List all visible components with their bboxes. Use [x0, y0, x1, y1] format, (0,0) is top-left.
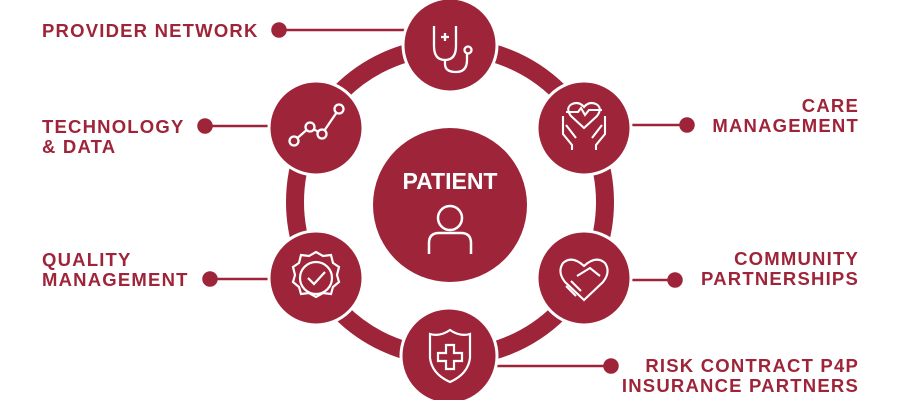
label: quality management: MANAGEMENT — [42, 269, 189, 290]
label: community partnerships: COMMUNITY — [734, 248, 859, 269]
node: technology & data (chart) — [269, 81, 363, 175]
label: risk contract: INSURANCE PARTNERS — [622, 375, 859, 396]
label: quality management: QUALITY — [42, 249, 132, 270]
connector lines — [198, 24, 694, 372]
center circle: patient: PATIENT — [403, 168, 497, 194]
node: risk contract (shield cross) — [401, 308, 497, 400]
label: care management: CARE — [802, 95, 859, 116]
label: community partnerships: PARTNERSHIPS — [701, 268, 859, 289]
center circle: patient — [373, 128, 527, 282]
node: community partnerships (handshake heart) — [537, 231, 631, 325]
label: technology & data: TECHNOLOGY — [42, 116, 185, 137]
label: technology & data: & DATA — [42, 136, 116, 157]
node: quality management (badge) — [269, 231, 363, 325]
label: provider network: PROVIDER NETWORK — [42, 20, 259, 41]
label: risk contract: RISK CONTRACT P4P — [645, 355, 859, 376]
ring — [295, 47, 605, 357]
icon: person — [429, 206, 471, 254]
label: care management: MANAGEMENT — [712, 115, 859, 136]
node: provider network (stethoscope) — [403, 0, 497, 92]
node: care management (hands heart) — [537, 81, 631, 175]
